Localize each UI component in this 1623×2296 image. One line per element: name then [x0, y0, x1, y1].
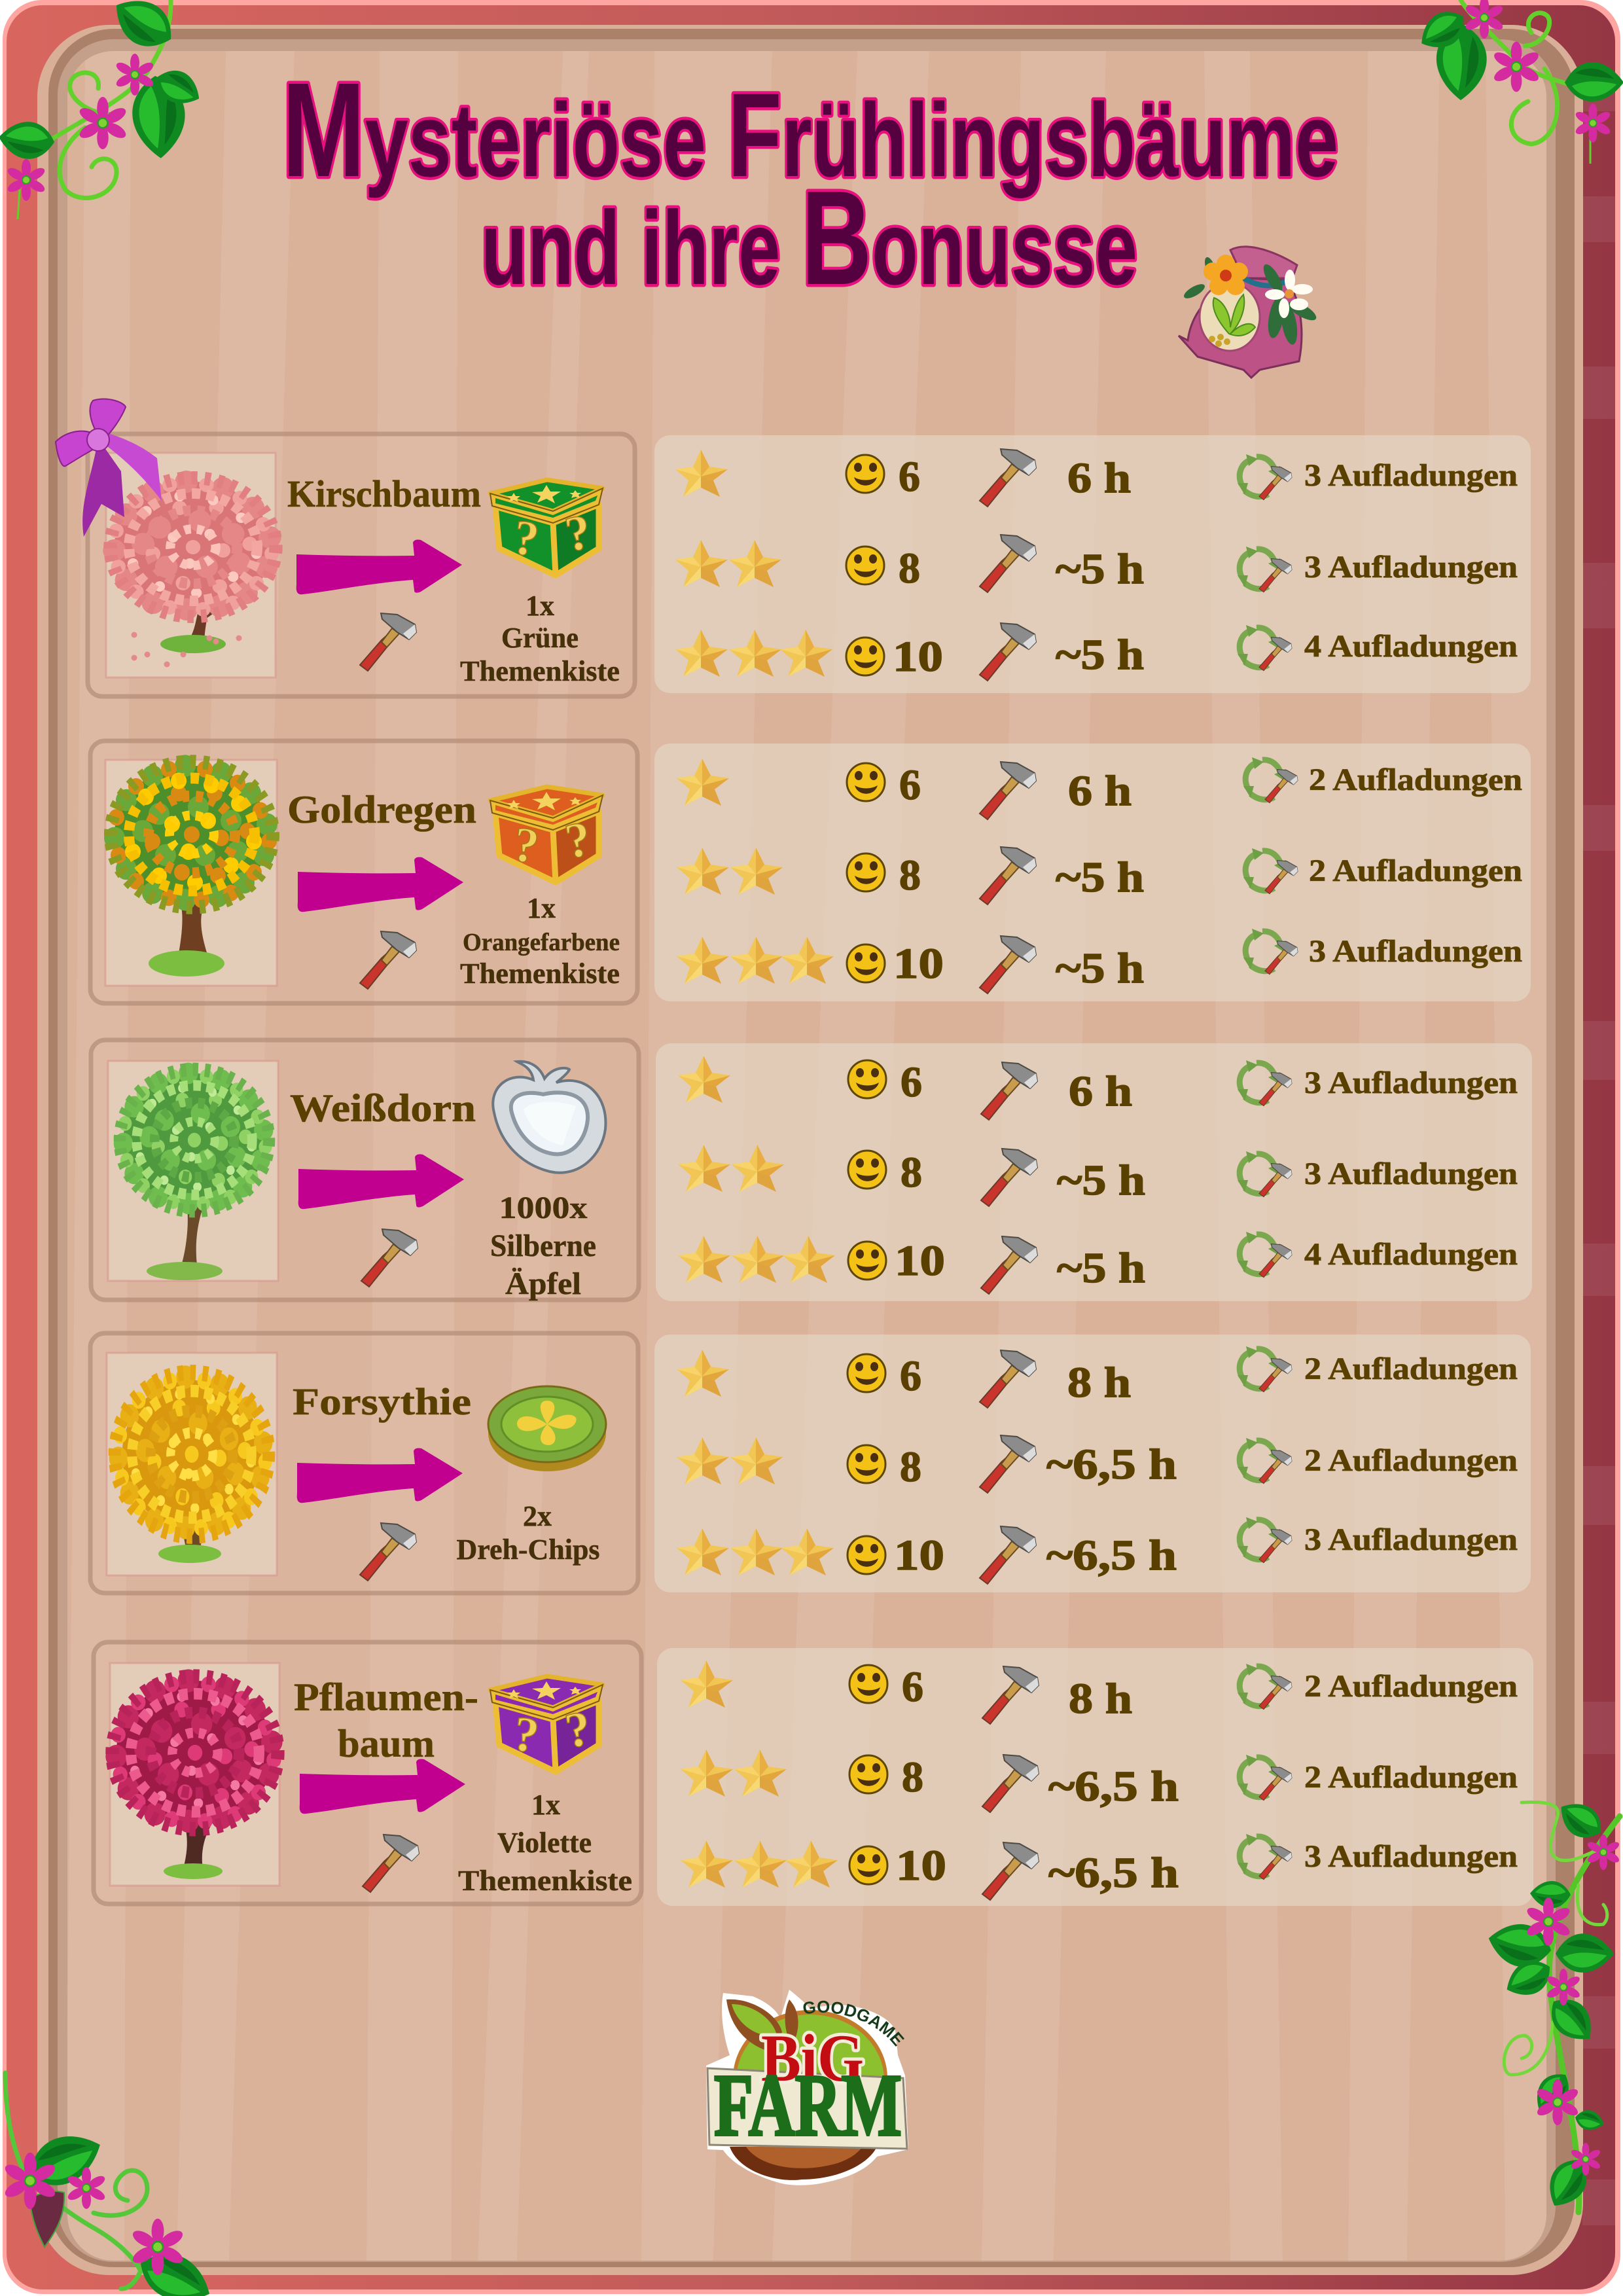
row: 2 stars: 2 Aufladungen: [1309, 853, 1522, 888]
row: 1 star: 6: [899, 761, 921, 809]
tree card: [106, 453, 276, 677]
tree card: [108, 1061, 278, 1281]
reward text: [458, 1789, 632, 1897]
tree: Weißdorn: [120, 1069, 269, 1280]
row: 3 stars: [681, 1834, 1518, 1900]
row: 3 stars: 10: [894, 1532, 944, 1579]
row: 1 star: 6 h: [1069, 1067, 1132, 1115]
title: und ihre Bonusse: [481, 163, 1137, 313]
row: 1 star: 6: [902, 1663, 923, 1711]
panel: Kirschbaum: [88, 434, 635, 696]
row: 3 stars: [675, 623, 1518, 681]
row: 2 stars: 3 Aufladungen: [1304, 550, 1518, 584]
reward text: 2x: [523, 1500, 552, 1532]
label: Pflaumen-: [294, 1676, 478, 1719]
row: 1 star: [675, 449, 1518, 507]
row: 2 stars: [677, 847, 1522, 905]
row: 1 star: 2 Aufladungen: [1304, 1352, 1518, 1386]
row: 2 stars: ~5 h: [1056, 545, 1144, 593]
reward text: 1x: [527, 892, 556, 924]
row: 2 stars: 2 Aufladungen: [1304, 1760, 1518, 1795]
logo: Goodgame Big Farm: [706, 1990, 908, 2185]
reward text: 1000x: [499, 1191, 588, 1225]
reward text: Themenkiste: [458, 1865, 632, 1897]
row: 3 stars: ~5 h: [1056, 631, 1144, 679]
reward text: Silberne: [490, 1229, 596, 1263]
row: 2 stars: [678, 1145, 1518, 1206]
icon: hammer: [363, 1835, 419, 1892]
row: 1 star: 6 h: [1067, 454, 1131, 502]
row: 1 star: 6: [901, 1058, 922, 1106]
row: 2 stars: 8: [901, 1149, 922, 1196]
row: 3 stars: 4 Aufladungen: [1304, 1237, 1518, 1272]
row: 3 stars: 10: [893, 940, 944, 988]
panel: Goldregen bonuses: [654, 744, 1531, 1001]
vine: top left: [0, 0, 206, 219]
vine: top right: [1413, 0, 1623, 164]
row: 2 stars: [677, 1435, 1518, 1493]
row: 1 star: 8 h: [1067, 1359, 1131, 1407]
row: 1 star: 2 Aufladungen: [1304, 1669, 1518, 1704]
row: 1 star: 6: [899, 453, 920, 501]
row: 1 star: 6: [900, 1352, 921, 1400]
row: 3 stars: 3 Aufladungen: [1309, 934, 1522, 969]
text: Big: BiG: [761, 2021, 864, 2096]
reward text: [460, 590, 620, 687]
row: 2 stars: 8: [899, 545, 920, 592]
row: 3 stars: 3 Aufladungen: [1304, 1522, 1518, 1557]
row: 1 star: [678, 1056, 1518, 1120]
vine: bottom left: [3, 2073, 219, 2296]
row: 2 stars: 8: [899, 852, 921, 899]
row: 3 stars: ~5 h: [1056, 944, 1144, 992]
row: 1 star: [677, 757, 1522, 819]
row: 2 stars: ~5 h: [1056, 853, 1144, 901]
row: 2 stars: 8: [900, 1443, 921, 1491]
reward text: Dreh-Chips: [457, 1534, 599, 1566]
row: 2 stars: 8: [902, 1753, 923, 1801]
row: 2 stars: ~5 h: [1057, 1157, 1145, 1204]
reward text: Äpfel: [505, 1266, 581, 1301]
tree: Goldregen: [111, 762, 273, 977]
row: 1 star: 8 h: [1069, 1675, 1132, 1723]
text: Farm: FARM: [714, 2056, 902, 2155]
row: 3 stars: ~5 h: [1057, 1244, 1145, 1292]
tree card: [105, 760, 277, 986]
row: 2 stars: 2 Aufladungen: [1304, 1443, 1518, 1478]
row: 3 stars: [677, 929, 1522, 994]
text: Goodgame: GOODGAME: [804, 2000, 904, 2047]
label: Goldregen: [287, 788, 476, 831]
icon: seed sack: [1179, 247, 1319, 378]
row: 3 stars: [677, 1517, 1518, 1584]
row: 2 stars: ~6,5 h: [1048, 1763, 1179, 1810]
row: 3 stars: ~6,5 h: [1048, 1849, 1179, 1897]
reward text: Grüne: [501, 622, 579, 654]
reward text: [490, 1191, 596, 1301]
panel: Forsythie bonuses: [654, 1335, 1531, 1592]
reward text: [460, 892, 620, 990]
icon: green chest: [490, 480, 603, 575]
reward text: Orangefarbene: [463, 929, 620, 956]
label: baum: [338, 1722, 435, 1765]
panel: Pflaumenbaum: [94, 1642, 641, 1904]
row: 3 stars: 10: [895, 1237, 945, 1285]
row: 2 stars: ~6,5 h: [1046, 1441, 1177, 1488]
tree card: [110, 1663, 279, 1886]
row: 1 star: 6 h: [1068, 767, 1132, 815]
icon: hammer: [360, 1523, 416, 1581]
row: 3 stars: 10: [896, 1842, 946, 1890]
reward text: Themenkiste: [460, 958, 620, 990]
row: 3 stars: ~6,5 h: [1046, 1532, 1177, 1579]
icon: ribbon bow: [56, 399, 162, 537]
title: [282, 55, 1338, 313]
arrow: [297, 1448, 463, 1503]
row: 1 star: 2 Aufladungen: [1309, 762, 1522, 797]
icon: orange chest: [490, 787, 603, 882]
row: 1 star: [677, 1346, 1518, 1408]
arrow: [298, 1155, 464, 1209]
dark leaf: [29, 2191, 64, 2247]
panel: Forsythie: [90, 1333, 638, 1593]
row: 2 stars: [675, 535, 1518, 593]
title: Mysteriöse Frühlingsbäume: [282, 55, 1338, 205]
label: Forsythie: [293, 1380, 471, 1423]
row: 2 stars: [681, 1749, 1518, 1812]
arrow: [298, 857, 463, 912]
tree: Kirschbaum: [111, 478, 276, 664]
reward text: Violette: [497, 1827, 592, 1859]
panel: Weißdorn bonuses: [656, 1043, 1532, 1301]
vine: bottom right: [1484, 1794, 1621, 2214]
icon: silver apple: [493, 1062, 605, 1173]
label: Weißdorn: [290, 1086, 476, 1130]
row: 1 star: 3 Aufladungen: [1304, 1066, 1518, 1100]
row: 3 stars: [678, 1232, 1518, 1294]
row: 1 star: [681, 1660, 1518, 1724]
reward text: 1x: [526, 590, 554, 622]
reward text: Themenkiste: [460, 655, 620, 687]
row: 2 stars: 3 Aufladungen: [1304, 1157, 1518, 1191]
panel: Kirschbaum bonuses: [654, 435, 1531, 693]
tree card: [107, 1353, 277, 1575]
row: 1 star: 3 Aufladungen: [1304, 458, 1518, 493]
label: [294, 1676, 478, 1765]
icon: violet chest: [490, 1676, 603, 1772]
icon: hammer: [360, 931, 416, 989]
icon: hammer: [360, 613, 416, 671]
row: 3 stars: 10: [893, 633, 943, 681]
icon: spin chip: [488, 1386, 606, 1471]
panel: Goldregen: [90, 741, 637, 1003]
panel: Weißdorn: [91, 1040, 639, 1301]
icon: hammer: [361, 1229, 418, 1287]
arrow: [296, 539, 462, 594]
tree: Forsythie: [115, 1372, 269, 1563]
tree: Pflaumenbaum: [113, 1676, 277, 1879]
label: Kirschbaum: [287, 473, 481, 515]
arrow: [300, 1759, 465, 1814]
reward text: 1x: [531, 1789, 560, 1821]
row: 3 stars: 3 Aufladungen: [1304, 1839, 1518, 1874]
row: 3 stars: 4 Aufladungen: [1304, 629, 1518, 664]
reward text: [457, 1500, 599, 1566]
panel: Pflaumenbaum bonuses: [657, 1648, 1533, 1906]
